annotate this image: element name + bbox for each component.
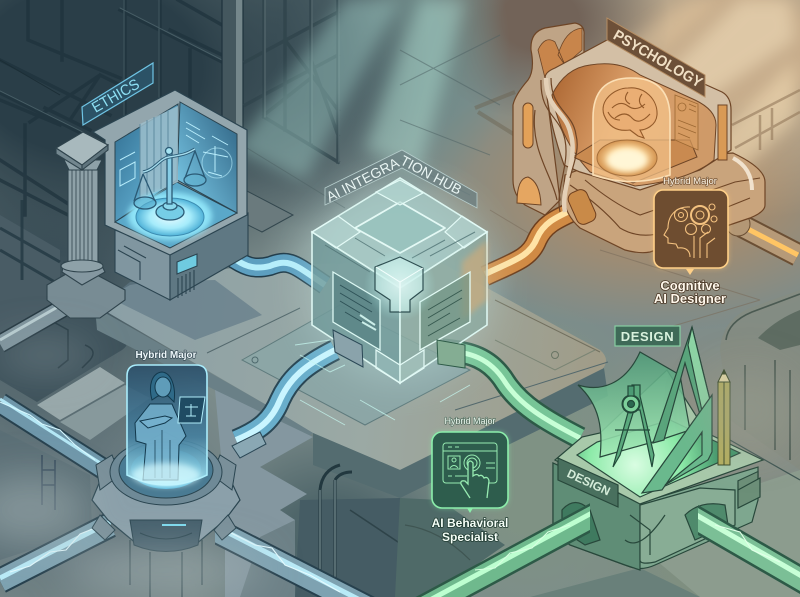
ai integration hub [291, 150, 511, 426]
hub cube: right display panel [420, 272, 470, 350]
scaffolding: right frame on the grey floor [245, 0, 339, 162]
design module: inner well [577, 420, 740, 497]
pipe: lower left blue conduit [0, 399, 105, 470]
design module rim [555, 370, 763, 508]
icon: hand tapping interface [443, 443, 497, 498]
floor: cast shadow from ethics module [110, 280, 262, 340]
scaffolding: main tall pillar [222, 0, 243, 132]
icon: design shield sheet [578, 352, 690, 457]
psychology module: side vents [517, 103, 727, 205]
scaffolding: background steel frames [0, 0, 222, 215]
icon: set square [642, 395, 712, 493]
ethics module: outer frame [93, 90, 247, 255]
callout subtitle: AI Designer [654, 291, 726, 306]
pipe: bottom right blue conduit [215, 515, 375, 597]
psychology label: PSYCHOLOGY [610, 27, 705, 91]
design module body [553, 463, 758, 570]
callout card [654, 190, 728, 268]
floor: slab side face band [95, 307, 313, 441]
callout heading: Hybrid Major [444, 416, 496, 426]
hub label: AI INTEGRATION HUB [328, 155, 461, 202]
psychology module: back flowing fin [513, 23, 584, 215]
callout: ai behavioral specialist [432, 416, 508, 544]
ethics module: interior floor [115, 182, 237, 248]
ethics module: interior right wall [177, 102, 237, 213]
design label: DESIGN [621, 329, 674, 344]
pipe: ethics to hub [200, 232, 325, 285]
fog overlays [0, 339, 795, 595]
greek column [47, 132, 125, 318]
psychology module: alcove floor [573, 140, 697, 183]
pipe: green lower right [698, 505, 800, 594]
callout card [432, 432, 508, 508]
hub cube: front corner core [364, 249, 436, 321]
floor: pad under the hub [242, 305, 470, 425]
ethics label [82, 63, 153, 125]
callout heading: Hybrid Major [663, 176, 717, 187]
psychology module: brain dome [593, 78, 670, 182]
design module: tag: DESIGN [565, 466, 613, 498]
design label [615, 326, 680, 346]
hub cube: display lines on upper side [325, 232, 475, 272]
hub cube: translucent faces [312, 178, 487, 288]
pipe: green lower left [416, 503, 590, 597]
floor: lower right platforms [395, 440, 800, 597]
callout subtitle: Specialist [442, 530, 498, 544]
pipe: bottom left blue conduit [0, 522, 110, 581]
design module: side vent [738, 478, 760, 508]
icon: drafting compass [613, 385, 654, 467]
icon: head with gears [664, 204, 717, 258]
psychology pipe to hub [485, 205, 582, 276]
hub cube: warm side tint [462, 240, 487, 320]
ethics module: interior left wall [115, 104, 178, 222]
ethics module: base [115, 213, 248, 300]
pipe: hybrid node to hub [232, 350, 335, 458]
psychology module: flowing ribbons [534, 78, 577, 212]
ethics module: curtain [140, 106, 178, 200]
hybrid major node: base [92, 432, 240, 597]
floor: central slab [95, 262, 608, 498]
floor: left tiles beside node [0, 367, 150, 560]
hub cube: side corner chunks [312, 216, 487, 383]
psychology module: main housing [545, 40, 731, 190]
psychology module: alcove [552, 64, 716, 186]
icon: scales of justice [134, 148, 206, 220]
psychology module: base bands [570, 158, 760, 235]
callout card glow [654, 190, 728, 268]
callout pointer nubs [467, 508, 473, 513]
hub cube: glow [308, 190, 492, 380]
icon: pencil [718, 370, 730, 465]
hub cube: top inset tile [355, 202, 445, 253]
figure: robed woman with tablet [135, 372, 205, 480]
hub cube: base circuit lines [295, 340, 470, 425]
callout: cognitive ai designer [654, 176, 728, 306]
hub cube: peak tile [376, 180, 423, 205]
collar: left outlet [562, 502, 600, 545]
hub flanges [333, 330, 465, 368]
ethics module [93, 90, 248, 300]
pipe: hub to design [442, 350, 580, 438]
callout title: AI Behavioral [432, 516, 508, 530]
psychology module: wall panel [675, 95, 698, 150]
psychology module: fin inner curves [538, 28, 582, 78]
floor: left dark pit under fence [0, 190, 293, 335]
hologram: ai ethics specialist [127, 365, 207, 487]
psychology module: lower base [563, 153, 765, 253]
pipe: upper left blue conduit [0, 292, 81, 344]
collar: right outlet [685, 504, 728, 540]
psychology pipe collar [566, 187, 598, 227]
floor: slab right side face [313, 368, 608, 498]
callout title: Cognitive [660, 278, 720, 293]
floor: pit at upper left with fog [0, 305, 127, 402]
icon: brain [603, 88, 657, 138]
light rays: teal and amber shafts [235, 0, 795, 190]
ethics label: ETHICS [89, 76, 143, 116]
hybrid major heading: Hybrid Major [135, 350, 197, 361]
callout card glow [432, 432, 508, 508]
hub cube: left display panel [333, 272, 380, 350]
icon: tall triangle ruler [653, 327, 710, 443]
psychology module [513, 18, 765, 253]
floor: upper tile outlines and psychology rails [0, 35, 800, 330]
ethics module: wall data panel [120, 122, 232, 186]
background structure: right-hand curved pit [720, 290, 800, 470]
design module: tag [558, 458, 618, 507]
ethics module: glowing disc [128, 192, 212, 240]
pipe: psychology right outlet [726, 212, 798, 255]
floor: node ledge and pits [215, 390, 430, 597]
callout pointers [686, 269, 694, 275]
